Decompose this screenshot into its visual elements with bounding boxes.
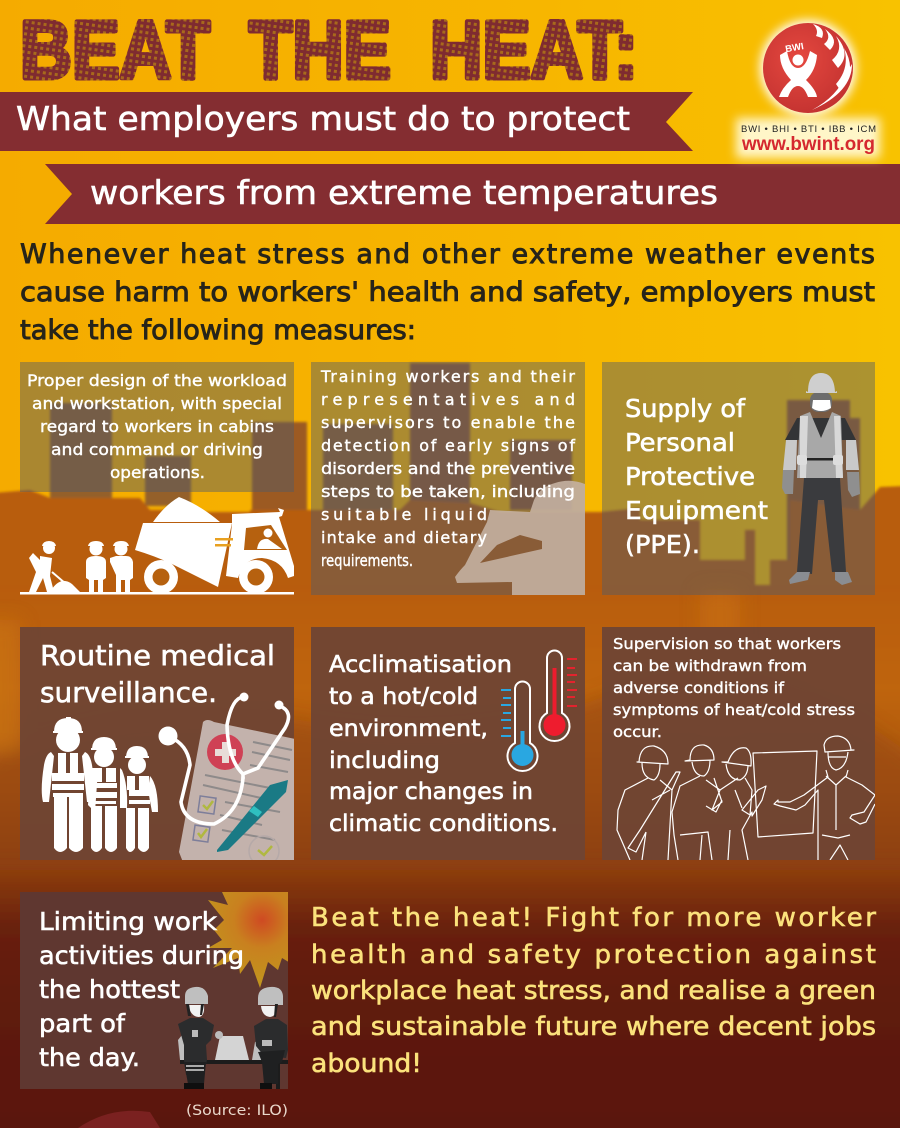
icon: blue thermometer [501, 682, 538, 771]
panel text: acclimatisation: Acclimatisation [329, 652, 512, 678]
panel text: training workers: disorders and the preventive [321, 459, 575, 478]
panel text: supervision [613, 635, 855, 741]
panel text: workload design: regard to workers in cabins [40, 417, 274, 436]
panel text: acclimatisation: including [329, 748, 440, 774]
panel text: acclimatisation [329, 652, 558, 837]
intro paragraph [20, 239, 875, 346]
panel text: limiting work [39, 907, 244, 1072]
panel text: training workers: detection of early signs of [321, 436, 575, 455]
icon: red thermometer [540, 650, 577, 741]
closing call to action [311, 903, 876, 1079]
intro paragraph: take the following measures: [20, 315, 416, 346]
title: BEAT [20, 5, 210, 96]
panel text: workload design: Proper design of the workload [27, 371, 287, 390]
panel: workload design [20, 362, 294, 594]
source note: (Source: ILO) [186, 1103, 288, 1119]
closing call to action: health and safety protection against [311, 940, 876, 970]
panel text: medical surveillance: surveillance. [40, 676, 217, 709]
panel text: limiting work: activities during [39, 941, 244, 970]
panel: medical surveillance [20, 627, 300, 870]
icon: dump truck and workers [20, 497, 294, 594]
icon: worker drinking silhouette [455, 481, 585, 595]
panel text: training workers: representatives and [321, 390, 575, 409]
panel text: acclimatisation: major changes in [329, 779, 533, 805]
panel text: training workers: requirements. [321, 551, 413, 570]
panel text: acclimatisation: to a hot/cold [329, 684, 478, 710]
panel text: training workers: supervisors to enable the [321, 413, 575, 432]
panel text: acclimatisation: climatic conditions. [329, 811, 558, 837]
closing call to action: Beat the heat! Fight for more worker [311, 903, 876, 933]
title [20, 5, 638, 96]
panel: training workers [311, 362, 585, 595]
panel text: training workers: steps to be taken, including [321, 482, 575, 501]
closing call to action: workplace heat stress, and realise a green [311, 976, 876, 1006]
panel text: PPE: Personal [625, 428, 735, 457]
subtitle banner 2 [45, 164, 900, 224]
panel text: limiting work: the hottest [39, 975, 180, 1004]
panel text: limiting work: Limiting work [39, 907, 218, 936]
panel text: PPE: Equipment [625, 496, 768, 525]
panel: limiting work [20, 892, 292, 1089]
BWI logo: www.bwint.org [741, 134, 875, 155]
panel text: supervision: symptoms of heat/cold stress [613, 701, 855, 719]
panel text: limiting work: the day. [39, 1043, 140, 1072]
panel text: supervision: occur. [613, 723, 662, 741]
panel: acclimatisation [311, 627, 585, 860]
panel: supervision [602, 627, 875, 860]
panel text: supervision: Supervision so that workers [613, 635, 841, 653]
panel text: workload design [27, 371, 287, 482]
icon: medical clipboard and pen [179, 720, 294, 860]
panel text: training workers: suitable liquid [321, 505, 487, 524]
closing call to action: abound! [311, 1049, 422, 1079]
icon: line drawing of workers and board [617, 736, 875, 860]
title: THE [249, 5, 391, 96]
intro paragraph: Whenever heat stress and other extreme weather events [20, 239, 875, 270]
icon: three workers [42, 717, 158, 852]
panel text: PPE [625, 394, 768, 559]
panel text: supervision: adverse conditions if [613, 679, 785, 697]
BWI logo [736, 20, 880, 158]
panel text: medical surveillance: Routine medical [40, 639, 275, 672]
subtitle banner 1 [0, 92, 693, 151]
panel text: workload design: and workstation, with special [32, 394, 282, 413]
icon: seated workers on bench [178, 987, 288, 1089]
panel text: limiting work: part of [39, 1009, 126, 1038]
panel text: PPE: (PPE). [625, 530, 700, 559]
panel text: supervision: can be withdrawn from [613, 657, 807, 675]
closing call to action: and sustainable future where decent jobs [311, 1012, 876, 1042]
panel text: training workers: intake and dietary [321, 528, 487, 547]
intro paragraph: cause harm to workers' health and safety, employers must [20, 277, 875, 308]
panel text: PPE: Supply of [625, 394, 746, 423]
panel text: workload design: operations. [110, 463, 205, 482]
panel text: training workers [320, 367, 575, 570]
panel text: PPE: Protective [625, 462, 755, 491]
icon: worker in PPE [782, 373, 860, 585]
BWI logo: BWI [785, 41, 805, 55]
icon: sun [208, 892, 292, 988]
subtitle banner 2: workers from extreme temperatures [90, 173, 718, 212]
panel text: acclimatisation: environment, [329, 716, 488, 742]
title: HEAT: [430, 5, 638, 96]
BWI logo: BWI • BHI • BTI • IBB • ICM [741, 124, 876, 135]
panel text: workload design: and command or driving [51, 440, 263, 459]
panel text: medical surveillance [40, 639, 275, 709]
panel text: training workers: Training workers and their [320, 367, 575, 386]
panel: PPE [602, 362, 875, 595]
subtitle banner 1: What employers must do to protect [16, 99, 630, 138]
icon: stethoscope [158, 692, 289, 824]
